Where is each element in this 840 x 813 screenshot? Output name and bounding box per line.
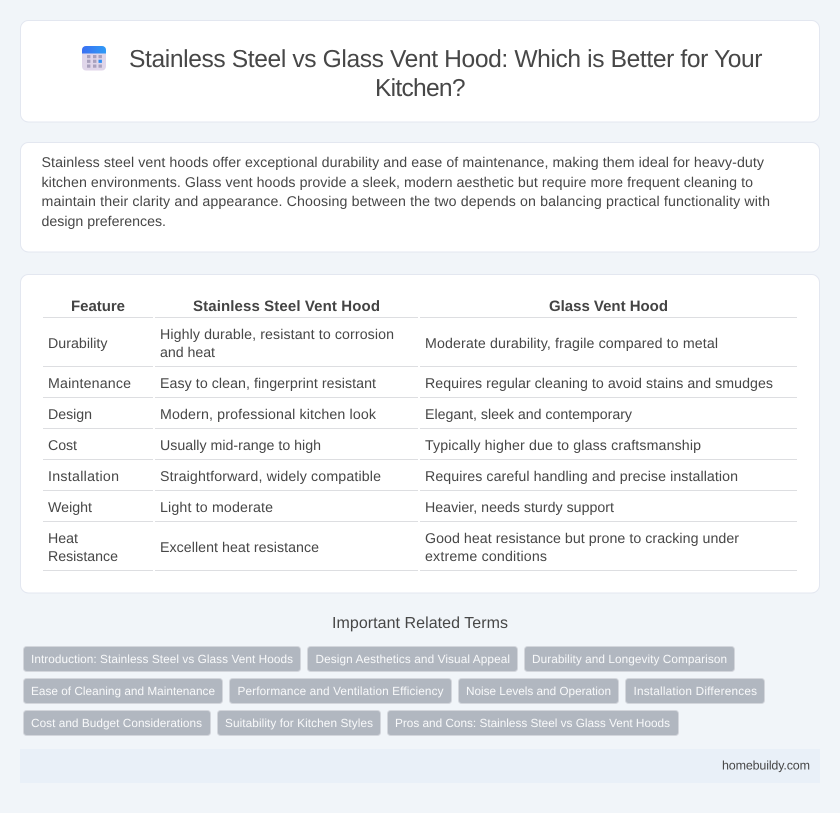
intro card bbox=[20, 142, 820, 252]
panel: comparison table bbox=[20, 274, 820, 593]
row: maintenance: Easy to clean, fingerprint resistant bbox=[160, 376, 376, 392]
table header row: Glass Vent Hood bbox=[549, 298, 668, 315]
row: durability bbox=[48, 327, 718, 361]
title: Stainless Steel vs Glass Vent Hood: Which is Better for Your bbox=[129, 46, 762, 73]
row: durability: Durability bbox=[48, 336, 108, 352]
row: maintenance bbox=[48, 376, 773, 392]
related terms heading: Important Related Terms bbox=[332, 615, 508, 632]
row: weight: Light to moderate bbox=[160, 500, 273, 516]
table card bbox=[20, 274, 820, 593]
intro text: Stainless steel vent hoods offer exceptional durability and ease of maintenance, making them ideal for heavy-duty bbox=[42, 155, 765, 171]
tag: pros and cons: Pros and Cons: Stainless Steel vs Glass Vent Hoods bbox=[395, 716, 670, 730]
row: design: Elegant, sleek and contemporary bbox=[425, 407, 633, 423]
row: installation bbox=[48, 469, 738, 485]
row: durability: and heat bbox=[160, 345, 215, 361]
tag: installation bbox=[626, 678, 764, 704]
tag: noise: Noise Levels and Operation bbox=[466, 684, 611, 698]
table header row: Stainless Steel Vent Hood bbox=[193, 298, 380, 315]
panel: header bbox=[20, 20, 820, 122]
row: installation: Installation bbox=[48, 469, 119, 485]
row: cost: Usually mid-range to high bbox=[160, 438, 321, 454]
row: installation: Requires careful handling and precise installation bbox=[425, 469, 738, 485]
row: heat resistance: Resistance bbox=[48, 549, 118, 565]
panel: introduction bbox=[20, 142, 820, 252]
tag: suitability: Suitability for Kitchen Styles bbox=[225, 716, 373, 730]
tag: cost bbox=[24, 710, 210, 736]
row: weight bbox=[48, 500, 614, 516]
row: heat resistance: Heat bbox=[48, 531, 78, 547]
tag: noise bbox=[458, 678, 618, 704]
row: design: Modern, professional kitchen look bbox=[160, 407, 377, 423]
row: design bbox=[48, 407, 633, 423]
row: cost bbox=[48, 438, 701, 454]
row: durability: Highly durable, resistant to corrosion bbox=[160, 327, 394, 343]
tag: cost: Cost and Budget Considerations bbox=[31, 716, 202, 730]
tag: durability bbox=[524, 646, 734, 672]
row: cost: Cost bbox=[48, 438, 77, 454]
row: durability: Moderate durability, fragile compared to metal bbox=[425, 336, 718, 352]
tag: introduction bbox=[24, 646, 300, 672]
footer bbox=[20, 749, 820, 783]
row: weight: Weight bbox=[48, 500, 92, 516]
tag: design aesthetics: Design Aesthetics and Visual Appeal bbox=[316, 652, 510, 666]
row: maintenance: Requires regular cleaning to avoid stains and smudges bbox=[425, 376, 773, 392]
row: installation: Straightforward, widely compatible bbox=[160, 469, 381, 485]
tag: performance bbox=[230, 678, 452, 704]
footer site name: homebuildy.com bbox=[722, 758, 810, 772]
footer bar bbox=[20, 749, 820, 783]
table header row: Feature bbox=[71, 298, 125, 315]
title bbox=[129, 46, 762, 102]
title: Kitchen? bbox=[375, 75, 466, 102]
tag: design aesthetics bbox=[308, 646, 518, 672]
row: heat resistance bbox=[48, 531, 739, 565]
row: heat resistance: Good heat resistance but prone to cracking under bbox=[425, 531, 739, 547]
tag: suitability bbox=[218, 710, 380, 736]
tag: performance: Performance and Ventilation Efficiency bbox=[238, 684, 444, 698]
tag: introduction: Introduction: Stainless Steel vs Glass Vent Hoods bbox=[31, 652, 293, 666]
intro text bbox=[42, 155, 770, 230]
row: heat resistance: Excellent heat resistance bbox=[160, 540, 319, 556]
tag: cleaning bbox=[24, 678, 222, 704]
intro text: maintain their clarity and appearance. Choosing between the two depends on balancing practical functionality with bbox=[42, 194, 770, 210]
row: weight: Heavier, needs sturdy support bbox=[425, 500, 614, 516]
tag: pros and cons bbox=[388, 710, 678, 736]
icon: calendar bbox=[82, 46, 106, 70]
row: design: Design bbox=[48, 407, 92, 423]
row: heat resistance: extreme conditions bbox=[425, 549, 547, 565]
section: important related terms bbox=[24, 615, 764, 736]
header card bbox=[20, 20, 820, 122]
intro text: design preferences. bbox=[42, 214, 166, 230]
table header row bbox=[71, 298, 668, 315]
intro text: kitchen environments. Glass vent hoods provide a sleek, modern aesthetic but require more frequent cleaning to bbox=[42, 175, 753, 191]
tag: installation: Installation Differences bbox=[634, 684, 757, 698]
row: maintenance: Maintenance bbox=[48, 376, 131, 392]
tag: durability: Durability and Longevity Comparison bbox=[532, 652, 727, 666]
tag: cleaning: Ease of Cleaning and Maintenance bbox=[31, 684, 215, 698]
row: cost: Typically higher due to glass craftsmanship bbox=[425, 438, 701, 454]
table row rules bbox=[43, 317, 797, 571]
